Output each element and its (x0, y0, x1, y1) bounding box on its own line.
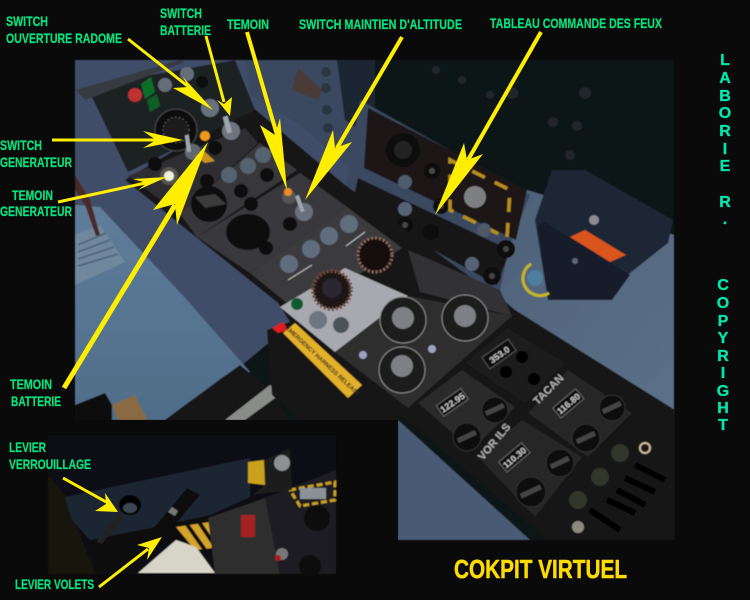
label: temoin generateur: GENERATEUR (0, 203, 72, 219)
vertical credit (717, 52, 731, 434)
side panels with floods (345, 100, 530, 300)
label: switch generateur (0, 137, 72, 170)
panel: top instrument (76, 60, 255, 172)
label: levier verrouillage: VERROUILLAGE (9, 456, 91, 472)
arrow: switch batterie (206, 36, 232, 116)
panel: ADF: 353.0 (487, 344, 512, 365)
panel: altitude (197, 173, 347, 273)
wall bracket (292, 68, 322, 100)
label: temoin batterie (10, 376, 61, 409)
panel: COM (418, 370, 515, 451)
vertical credit: A (719, 70, 731, 87)
inset: levers view (48, 435, 336, 577)
map (138, 540, 215, 573)
title: COKPIT VIRTUEL (454, 554, 627, 584)
label: switch maintien d'altitude: SWITCH MAINTIEN D'ALTITUDE (299, 16, 462, 32)
gray panel (208, 497, 280, 574)
panel: mode white (280, 238, 408, 352)
hazard stripes (176, 522, 213, 550)
label: switch batterie: BATTERIE (160, 22, 211, 38)
panel: VOR: 110.30 (501, 445, 528, 470)
arrow: levier verrouillage (63, 478, 118, 512)
arrow: temoin batterie (64, 142, 208, 388)
arrow: switch generateur (52, 131, 183, 148)
arrow: temoin (247, 32, 287, 190)
blue floor below console (398, 420, 530, 540)
panel: big rotary switches (335, 250, 512, 408)
lock lever (96, 495, 141, 544)
upper wall blue (245, 60, 375, 180)
vertical credit: L (720, 52, 730, 69)
label: tableau commande des feux: TABLEAU COMMANDE DES FEUX (490, 15, 662, 31)
red switch (241, 515, 255, 537)
label: temoin batterie: TEMOIN (10, 376, 52, 392)
vertical credit: Y (718, 330, 729, 347)
panel: ADF (465, 328, 565, 403)
label: temoin batterie: BATTERIE (11, 393, 61, 409)
floor lower left (75, 205, 250, 420)
arrow: temoin generateur (58, 177, 167, 202)
vertical credit: O (719, 105, 731, 122)
left wall (75, 60, 375, 400)
vertical credit: T (718, 417, 728, 434)
pouch (523, 170, 673, 300)
label: levier verrouillage: LEVIER (9, 439, 46, 455)
rivet column (321, 66, 591, 160)
yellow box (248, 460, 265, 485)
label: temoin generateur (0, 187, 72, 219)
vertical credit: I (721, 365, 725, 382)
vertical credit: C (717, 277, 729, 294)
step ladder (75, 175, 125, 285)
arrow: switch maintien d'altitude (305, 37, 402, 200)
label: switch ouverture radome (6, 13, 122, 46)
panel: TACAN: TACAN (531, 372, 566, 407)
vertical credit: B (719, 88, 731, 105)
label: temoin generateur: TEMOIN (12, 187, 53, 203)
label: levier volets: LEVIER VOLETS (15, 576, 94, 592)
label: switch batterie: SWITCH (160, 5, 202, 21)
label: switch ouverture radome: SWITCH (6, 13, 48, 29)
vertical credit: E (720, 158, 731, 175)
label: levier verrouillage (9, 439, 91, 472)
panel: TACAN (528, 370, 632, 457)
panel: knobs (180, 143, 297, 237)
cloth right (480, 190, 674, 420)
main console black frame (125, 105, 675, 540)
vertical credit: O (717, 295, 729, 312)
flap lever (142, 488, 200, 545)
label: switch generateur: SWITCH (0, 137, 42, 153)
seat (75, 365, 290, 420)
vertical credit: R (719, 194, 731, 211)
vertical credit: I (723, 141, 727, 158)
right panel (265, 470, 336, 574)
panel: out switches (250, 207, 402, 312)
blackout behind inset (0, 420, 398, 600)
panel: COM: 122.95 (438, 391, 467, 415)
vertical credit: H (717, 400, 729, 417)
panel: VOR (476, 420, 582, 517)
arrow: tableau commande des feux (435, 32, 541, 215)
harness bracket: EMERGENCY HARNESS RELEASE (284, 326, 361, 398)
label: switch batterie (160, 5, 211, 38)
arrow: switch ouverture radome (128, 39, 213, 110)
harness bracket (267, 322, 398, 420)
vertical credit: R (717, 348, 729, 365)
label: temoin: TEMOIN (227, 16, 269, 32)
vertical credit: P (718, 313, 729, 330)
vertical credit: . (723, 211, 727, 228)
vertical credit: R (719, 123, 731, 140)
arrow: levier volets (99, 537, 162, 587)
vertical credit: G (717, 383, 729, 400)
panel: generator strip (128, 116, 258, 214)
label: switch ouverture radome: OUVERTURE RADOME (6, 30, 122, 46)
panel: transponder (542, 423, 675, 540)
panel: TACAN: 116.80 (555, 391, 582, 416)
panel: VOR: VOR ILS (476, 421, 513, 463)
main cockpit view (75, 60, 675, 540)
label: switch generateur: GENERATEUR (0, 154, 72, 170)
